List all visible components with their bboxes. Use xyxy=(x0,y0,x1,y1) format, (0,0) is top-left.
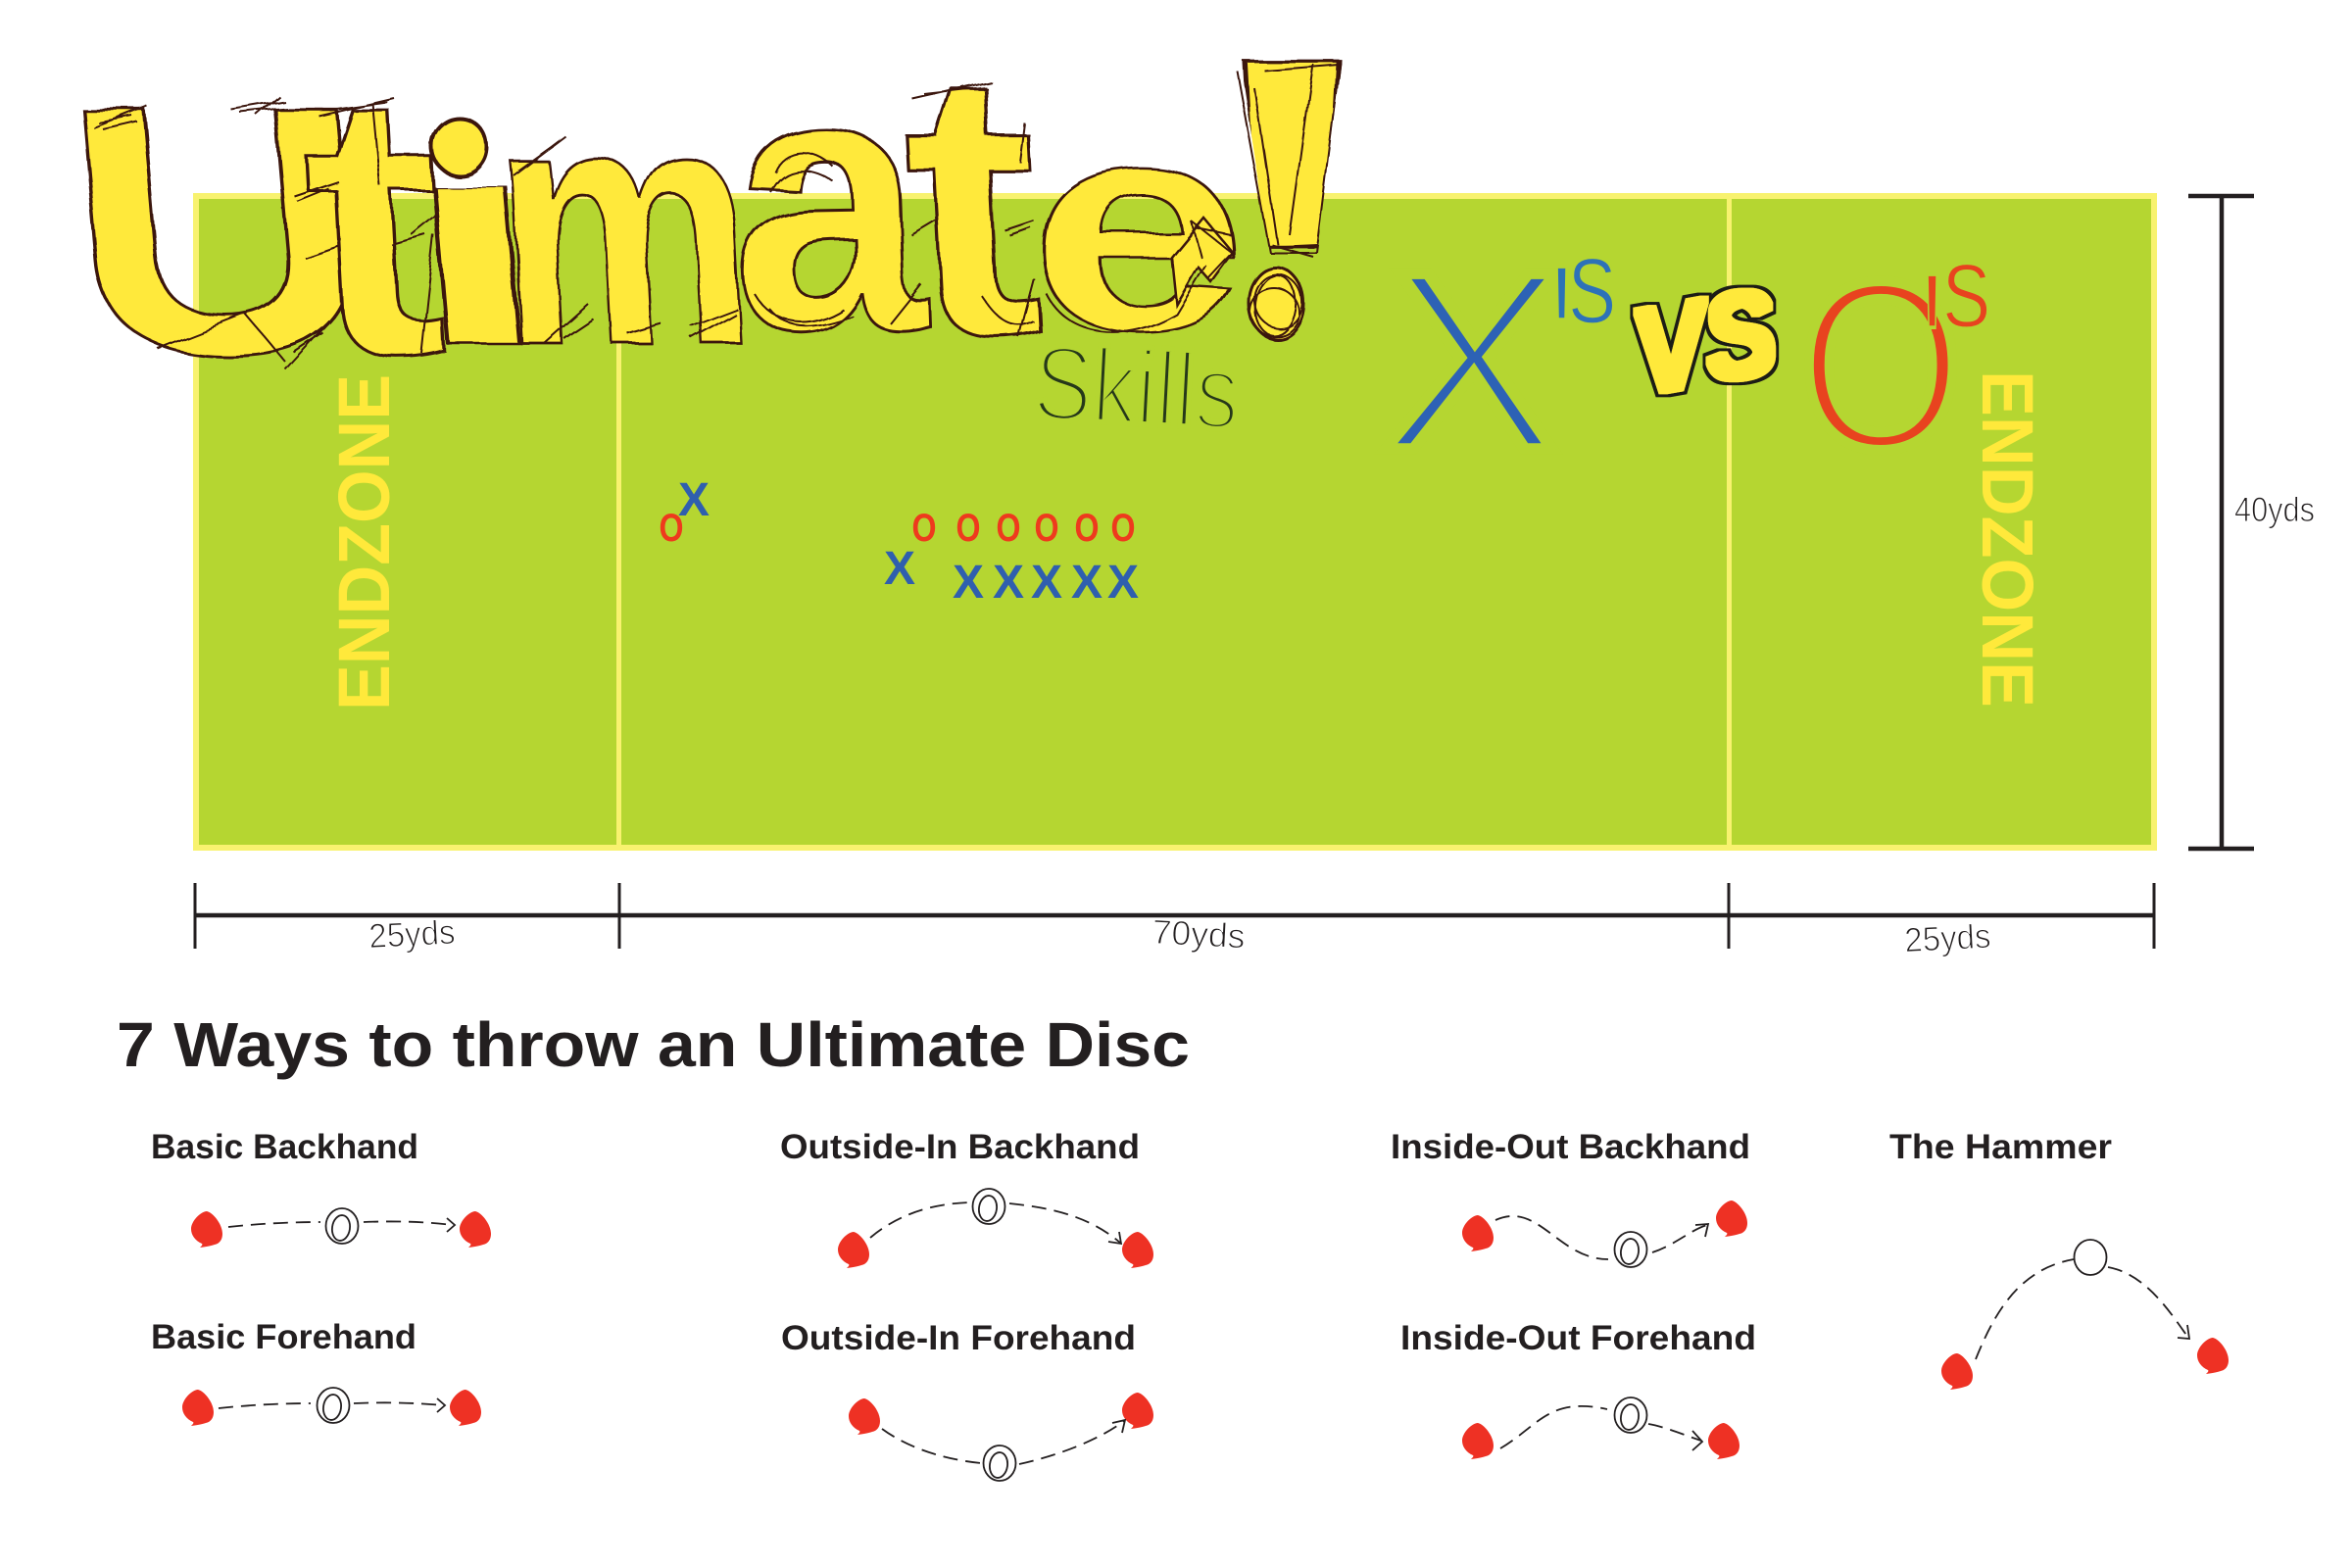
players: field formation: O xyxy=(956,507,980,550)
diagram: inside-out forehand xyxy=(1400,1319,1756,1459)
diagram: outside-in forehand xyxy=(781,1319,1153,1481)
diagram: inside-out forehand: Inside-Out Forehand xyxy=(1400,1319,1756,1357)
players: field formation: O xyxy=(1074,507,1100,550)
subtitle: skills: Skills xyxy=(1031,323,1243,453)
players: field formation: O xyxy=(659,507,684,550)
players: field formation: O xyxy=(1111,507,1135,550)
dimension: 40yds width: 40yds xyxy=(2234,491,2315,529)
right endzone label: ENDZONE xyxy=(1967,370,2048,708)
heading: X's team mark: ' xyxy=(1552,215,1571,488)
heading: O's team mark: ' xyxy=(1923,222,1941,496)
diagram: basic forehand xyxy=(151,1318,481,1426)
label 25yds right: 25yds xyxy=(1903,917,1991,959)
heading: 7 ways: 7 Ways to throw an Ultimate Disc xyxy=(117,1009,1190,1080)
letter e: e xyxy=(1029,60,1247,393)
title: Ultimate! xyxy=(82,59,1343,370)
e tail xyxy=(1171,218,1233,304)
sketch scribbles xyxy=(93,63,1341,370)
players: field formation: X xyxy=(993,557,1024,609)
letter a: a xyxy=(723,0,934,409)
players: field formation: X xyxy=(884,543,915,595)
letter U: U xyxy=(51,33,389,427)
label 70yds: 70yds xyxy=(1152,913,1247,956)
label 25yds left: 25yds xyxy=(368,913,456,956)
diagram: outside-in backhand: Outside-In Backhand xyxy=(780,1128,1140,1166)
diagram: basic backhand xyxy=(151,1128,491,1248)
diagram: the hammer: The Hammer xyxy=(1889,1128,2112,1166)
players: field formation: X xyxy=(1107,557,1139,609)
players: field formation: X xyxy=(1031,557,1062,609)
players: field formation: X xyxy=(1071,557,1102,609)
heading: O's team mark: s xyxy=(1942,220,1991,353)
diagram: outside-in forehand: Outside-In Forehand xyxy=(781,1319,1136,1357)
letter t: t xyxy=(894,0,1050,415)
i dot xyxy=(431,118,486,174)
diagram: basic forehand: Basic Forehand xyxy=(151,1318,416,1356)
diagram: inside-out backhand xyxy=(1391,1128,1750,1267)
players: field formation: O xyxy=(1035,507,1058,550)
left endzone label: ENDZONE xyxy=(323,374,405,710)
players: field formation: X xyxy=(953,557,984,609)
players: field formation xyxy=(659,474,1139,609)
dimension: 40yds width xyxy=(2188,196,2315,849)
diagram: inside-out backhand: Inside-Out Backhand xyxy=(1391,1128,1750,1166)
heading: X's team mark: s xyxy=(1568,213,1617,350)
letter i: i xyxy=(388,74,562,407)
diagram: basic backhand: Basic Backhand xyxy=(151,1128,418,1166)
heading: X's team mark: X xyxy=(1377,220,1570,504)
exclamation dot xyxy=(1249,268,1305,338)
diagram: outside-in backhand xyxy=(780,1128,1153,1268)
panel: ultimate field xyxy=(196,196,2154,848)
players: field formation: O xyxy=(996,507,1021,550)
players: field formation: O xyxy=(911,507,937,550)
diagram: the hammer xyxy=(1889,1128,2229,1390)
heading: O's team mark: O xyxy=(1799,231,1962,499)
dimension: field lengths xyxy=(195,883,2155,959)
players: field formation: X xyxy=(678,474,710,526)
letter m: m xyxy=(485,32,762,416)
versus badge: VS xyxy=(1624,265,1786,419)
letter t: t xyxy=(294,16,453,432)
